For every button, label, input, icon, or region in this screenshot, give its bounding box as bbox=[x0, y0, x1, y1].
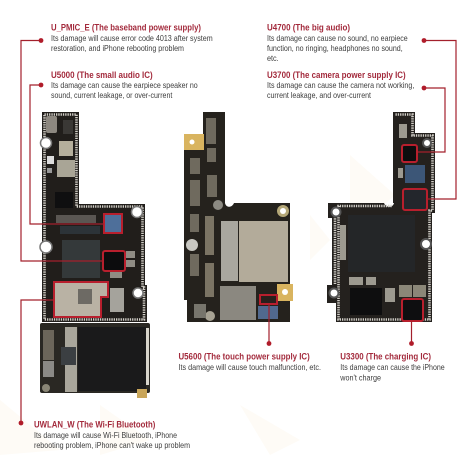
U3700 highlight bbox=[402, 145, 417, 162]
text: U3700: U3700 (The camera power supply IC) bbox=[267, 70, 406, 81]
text: UWLAN_W: rebooting problem, iPhone can't wake up problem bbox=[34, 440, 190, 450]
text: U5600: Its damage will cause touch malfunction, etc. bbox=[178, 362, 321, 372]
silver chip right of Wi-Fi bbox=[110, 288, 124, 312]
arrow: U5000 leader bbox=[30, 83, 104, 224]
text: U5000: Its damage can cause the earpiece speaker no bbox=[51, 80, 198, 90]
text: U4700: Its damage can cause no sound, no earpiece bbox=[267, 33, 408, 43]
text: UWLAN_W bbox=[34, 420, 190, 450]
text: U4700: etc. bbox=[267, 53, 279, 63]
lower component area bbox=[220, 286, 256, 320]
gold tab lower bbox=[277, 284, 293, 301]
text: U_PMIC_E: restoration, and iPhone rebooting problem bbox=[51, 43, 184, 53]
board: left lower section bbox=[40, 323, 150, 398]
mounting holes bbox=[186, 200, 289, 321]
gold tab top bbox=[184, 134, 204, 150]
blue chip bbox=[405, 165, 425, 183]
U3300 highlight bbox=[402, 299, 423, 321]
mounting holes bbox=[40, 138, 143, 298]
text: U5000 bbox=[51, 70, 198, 100]
mid connectors bbox=[205, 216, 214, 297]
A11 processor bbox=[348, 215, 415, 272]
U4700 highlight bbox=[403, 189, 427, 210]
text: U5000: U5000 (The small audio IC) bbox=[51, 70, 153, 81]
shields bbox=[221, 221, 288, 282]
text: U3300: won't charge bbox=[339, 372, 381, 382]
top chips bbox=[47, 120, 75, 208]
text: UWLAN_W: Its damage will cause Wi-Fi Bluetooth, iPhone bbox=[34, 430, 177, 440]
arrow: U_PMIC_E leader bbox=[21, 38, 103, 261]
watermark triangles bbox=[0, 155, 395, 455]
board: left bbox=[40, 112, 147, 322]
text: U5600: U5600 (The touch power supply IC) bbox=[178, 352, 310, 362]
text: UWLAN_W: UWLAN_W (The Wi-Fi Bluetooth) bbox=[34, 420, 155, 430]
oval crystal component bbox=[46, 116, 57, 133]
NAND chip bbox=[62, 240, 100, 278]
text: U3300: U3300 (The charging IC) bbox=[340, 352, 431, 362]
text: U4700: function, no ringing, headphones no sound, bbox=[267, 43, 403, 53]
text: U4700 bbox=[267, 22, 408, 63]
text: U3700: Its damage can cause the camera not working, bbox=[267, 80, 414, 90]
arrow: U3700 leader bbox=[418, 86, 445, 152]
arrow: UWLAN_W leader bbox=[19, 300, 53, 425]
small silver chips bbox=[340, 124, 426, 302]
lower black chip bbox=[350, 288, 382, 315]
text: U4700: U4700 (The big audio) bbox=[267, 22, 350, 34]
board: right bbox=[327, 112, 435, 322]
arrow: U3300 leader bbox=[409, 321, 414, 346]
audio IC highlight bbox=[103, 251, 125, 271]
UWLAN highlight bbox=[54, 282, 108, 317]
mounting holes bbox=[330, 139, 431, 298]
text: U_PMIC_E bbox=[51, 22, 213, 53]
text: U_PMIC_E: U_PMIC_E (The baseband power supply) bbox=[51, 22, 201, 34]
text: U3300 bbox=[339, 352, 445, 382]
arrow: U5600 leader bbox=[267, 304, 271, 346]
text: U3300: Its damage can cause the iPhone bbox=[340, 362, 445, 372]
text: U5600 bbox=[178, 352, 321, 372]
U5600 highlight bbox=[260, 295, 277, 304]
arrow: U4700 leader bbox=[422, 38, 456, 199]
board: middle bbox=[184, 112, 293, 322]
small components bbox=[56, 215, 135, 278]
text: U3700 bbox=[267, 70, 414, 100]
U5000 highlight bbox=[104, 214, 122, 233]
text: U3700: current leakage, and over-current bbox=[267, 90, 371, 100]
text: U_PMIC_E: Its damage will cause error code 4013 after system bbox=[51, 33, 213, 43]
text: U5000: sound, current leakage, or over-current bbox=[51, 90, 173, 100]
top connectors bbox=[190, 118, 217, 276]
